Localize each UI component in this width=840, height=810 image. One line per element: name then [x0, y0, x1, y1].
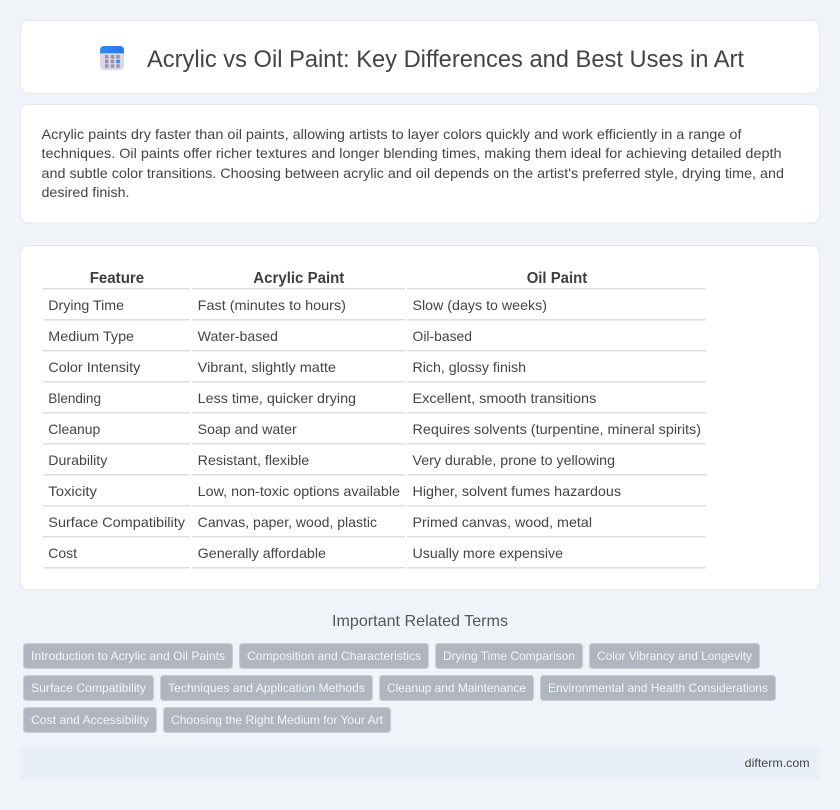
tag: Techniques and Application Methods: [168, 681, 365, 695]
table row: durability: [43, 452, 706, 476]
table row: durability: Durability: [48, 452, 107, 468]
text block: introduction paragraph: [42, 126, 784, 200]
tag: Introduction to Acrylic and Oil Paints: [31, 649, 225, 663]
table header: Acrylic Paint: [253, 270, 345, 287]
table row: surface compatibility: Canvas, paper, wood, plastic: [198, 514, 377, 530]
text block: introduction paragraph: desired finish.: [42, 184, 130, 200]
footer: [20, 746, 820, 780]
table row: medium type: Medium Type: [48, 328, 134, 344]
table header: [43, 270, 706, 290]
table row: cleanup: Soap and water: [198, 421, 297, 437]
footer: difterm.com: [745, 756, 810, 770]
table row: color intensity: Color Intensity: [48, 359, 140, 375]
tag: [540, 676, 776, 700]
table row: cost: Cost: [48, 545, 77, 561]
table row: medium type: [43, 328, 706, 352]
tag list: related terms: [24, 644, 776, 732]
panel: comparison table: [20, 246, 820, 590]
tag: [240, 644, 428, 668]
table row: cost: Generally affordable: [198, 545, 326, 561]
tag: [380, 676, 534, 700]
table row: blending: Blending: [48, 390, 101, 406]
tag: [164, 708, 390, 732]
tag: [436, 644, 582, 668]
tag: Color Vibrancy and Longevity: [597, 649, 752, 663]
table header: Oil Paint: [527, 270, 588, 287]
table row: medium type: Water-based: [198, 328, 278, 344]
tag: [590, 644, 760, 668]
table row: durability: Resistant, flexible: [198, 452, 309, 468]
table row: surface compatibility: Surface Compatibility: [48, 514, 185, 530]
tag: Cost and Accessibility: [31, 713, 149, 727]
tag: Drying Time Comparison: [443, 649, 575, 663]
panel: introduction: [20, 104, 820, 223]
tag: [24, 644, 232, 668]
table row: color intensity: [43, 359, 706, 382]
tag: Environmental and Health Considerations: [548, 681, 768, 695]
table row: cost: Usually more expensive: [412, 545, 563, 561]
table row: color intensity: Rich, glossy finish: [412, 359, 526, 375]
tag: [160, 676, 372, 700]
tag: Surface Compatibility: [31, 681, 146, 695]
title: Acrylic vs Oil Paint: Key Differences and Best Uses in Art: [147, 46, 744, 73]
table row: surface compatibility: Primed canvas, wood, metal: [412, 514, 592, 530]
table row: drying time: Drying Time: [48, 297, 124, 313]
icon: calendar: [100, 46, 124, 70]
table row: toxicity: Higher, solvent fumes hazardous: [412, 483, 621, 499]
table row: drying time: Slow (days to weeks): [412, 297, 547, 313]
table row: drying time: Fast (minutes to hours): [198, 297, 346, 313]
table row: color intensity: Vibrant, slightly matte: [198, 359, 336, 375]
tag: [24, 676, 154, 700]
text block: introduction paragraph: and subtle color transitions. Choosing between acrylic and oil depends on the artist's preferred style, drying time, and: [42, 165, 784, 181]
table row: toxicity: Low, non-toxic options available: [198, 483, 400, 499]
table row: surface compatibility: [43, 514, 706, 538]
table row: blending: Less time, quicker drying: [198, 390, 356, 406]
table row: medium type: Oil-based: [412, 328, 472, 344]
table row: toxicity: Toxicity: [48, 483, 97, 499]
table row: blending: Excellent, smooth transitions: [412, 390, 596, 406]
table row: cleanup: Requires solvents (turpentine, mineral spirits): [412, 421, 701, 437]
tag: Choosing the Right Medium for Your Art: [171, 713, 384, 727]
text block: introduction paragraph: techniques. Oil paints offer richer textures and longer blending times, making them ideal for achieving detailed depth: [42, 145, 781, 161]
text block: introduction paragraph: Acrylic paints dry faster than oil paints, allowing artists to layer colors quickly and work efficiently in a range of: [42, 126, 742, 142]
tag: [24, 708, 156, 732]
table row: cleanup: Cleanup: [48, 421, 101, 437]
table row: cost: [43, 545, 706, 568]
table row: drying time: [43, 297, 706, 320]
table row: toxicity: [43, 483, 706, 506]
table row: blending: [43, 390, 706, 414]
table row: cleanup: [43, 421, 706, 444]
tag: Cleanup and Maintenance: [387, 681, 526, 695]
tag: Composition and Characteristics: [247, 649, 421, 663]
table row: durability: Very durable, prone to yellowing: [412, 452, 615, 468]
panel: header: [20, 20, 820, 94]
table header: Feature: [90, 270, 144, 287]
heading: important related terms: Important Related Terms: [332, 613, 508, 630]
